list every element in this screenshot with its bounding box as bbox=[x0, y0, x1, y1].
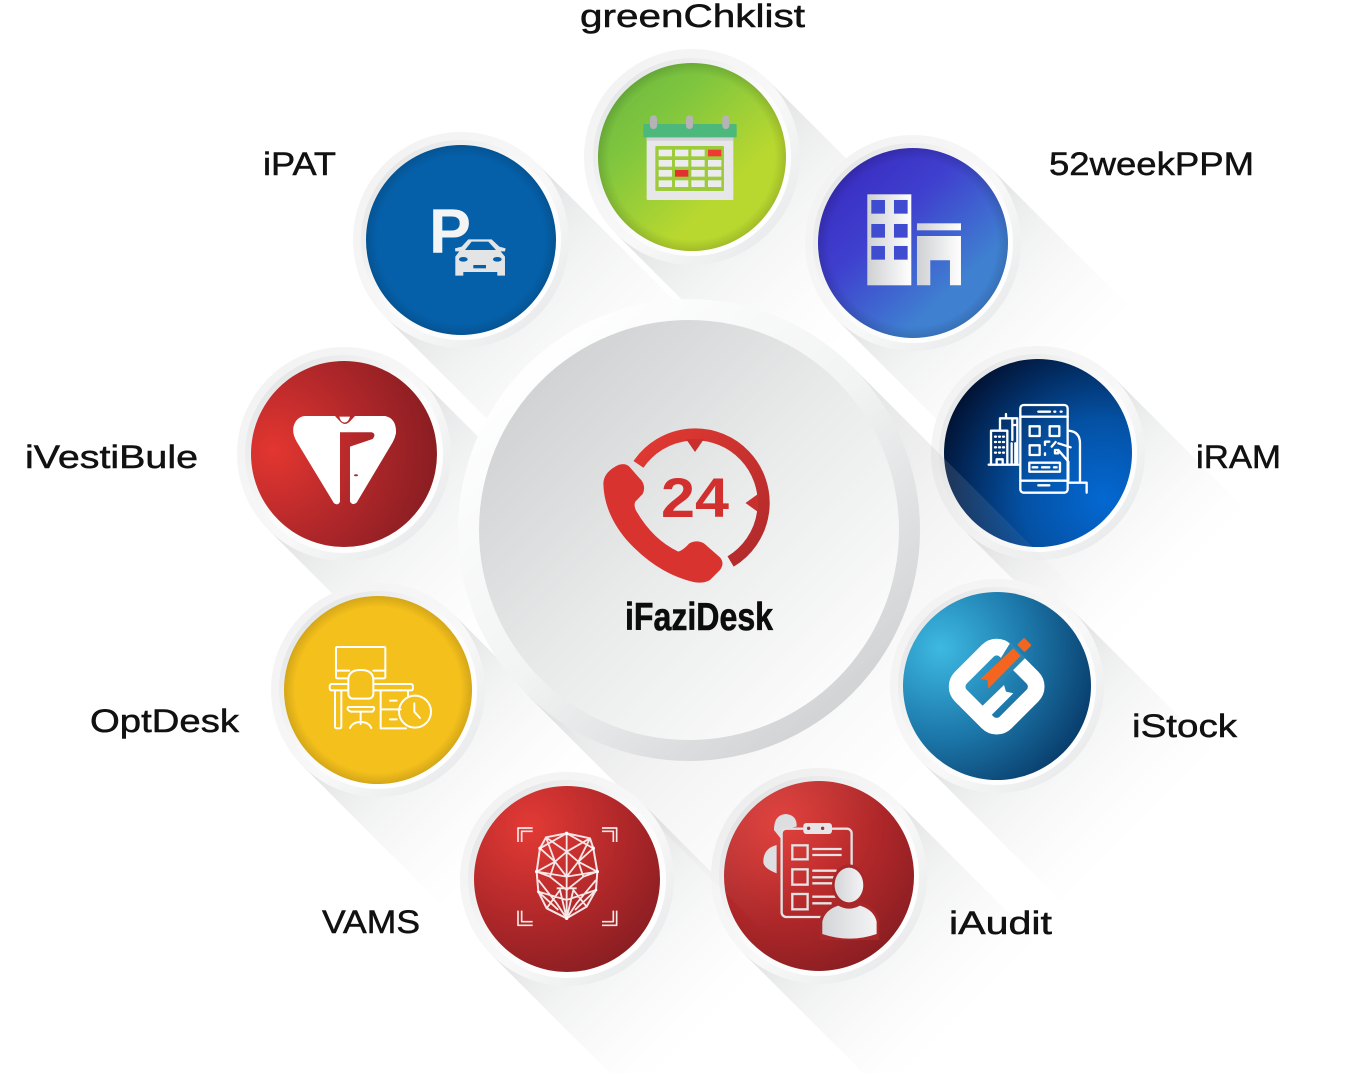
panel: OptDesk bbox=[271, 583, 485, 797]
icon: clipboard with people bbox=[763, 814, 879, 940]
label: iPAT: iPAT bbox=[263, 146, 336, 182]
label: 52weekPPM: 52weekPPM bbox=[1049, 146, 1254, 182]
long shadows bbox=[268, 81, 1248, 1073]
title: iFaziDesk: iFaziDesk bbox=[625, 596, 773, 639]
icon: 24 hour phone logo bbox=[603, 434, 764, 583]
icon: buildings bbox=[867, 194, 961, 285]
panel: iRAM bbox=[931, 346, 1145, 560]
panel: 52weekPPM bbox=[805, 135, 1021, 351]
icon: parking P and car bbox=[429, 197, 506, 276]
icon: calendar bbox=[643, 115, 737, 200]
label: iAudit: iAudit bbox=[949, 905, 1052, 941]
panel: iVestiBule bbox=[237, 347, 451, 561]
icon: diamond book and pencil bbox=[952, 638, 1041, 731]
icon: phone with QR code and buildings bbox=[989, 405, 1087, 493]
label: iStock: iStock bbox=[1132, 708, 1238, 744]
label: OptDesk: OptDesk bbox=[90, 703, 240, 739]
panel: greenChklist bbox=[584, 49, 800, 265]
label: iVestiBule: iVestiBule bbox=[25, 439, 198, 475]
panel: center hub bbox=[458, 299, 920, 761]
label: VAMS: VAMS bbox=[322, 904, 420, 940]
icon: door shield bbox=[293, 416, 396, 504]
panel: iPAT bbox=[353, 132, 569, 348]
icon: parking P and car: P bbox=[429, 197, 471, 267]
center long shadow bbox=[526, 367, 1093, 934]
icon: desk chair and clock bbox=[330, 647, 431, 728]
panel: iAudit bbox=[711, 768, 927, 984]
icon: 24 hour phone logo: 24 bbox=[661, 466, 729, 529]
panel: iStock bbox=[890, 579, 1104, 793]
panel: VAMS bbox=[460, 772, 674, 986]
label: iRAM: iRAM bbox=[1196, 439, 1281, 475]
icon: face scan mesh bbox=[518, 828, 617, 925]
